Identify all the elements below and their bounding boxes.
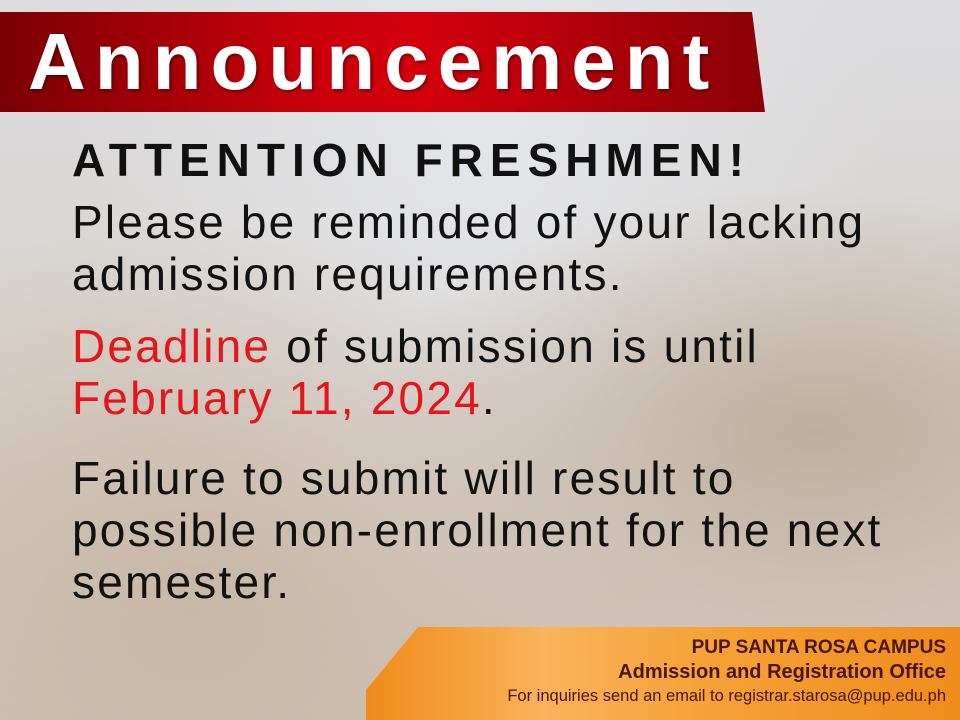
text block: failure warning (72, 452, 883, 608)
text block: failure warning: semester. (72, 556, 291, 608)
title text: Announcement (28, 17, 718, 106)
footer: office: Admission and Registration Office (618, 661, 946, 683)
heading: attention freshmen: ATTENTION FRESHMEN! (72, 134, 751, 186)
text block: failure warning: Failure to submit will result to (72, 452, 735, 504)
text block: deadline: February 11, 2024. (72, 372, 497, 424)
text block: reminder: admission requirements. (72, 248, 624, 300)
text block: deadline: Deadline of submission is until (72, 320, 759, 372)
text block: reminder: Please be reminded of your lacking (72, 196, 865, 248)
footer: contact: For inquiries send an email to registrar.starosa@pup.edu.ph (507, 687, 946, 705)
title banner (0, 12, 765, 112)
text block: reminder (72, 196, 865, 300)
text block: failure warning: possible non-enrollment for the next (72, 504, 883, 556)
text block: deadline (72, 320, 759, 424)
footer: campus: PUP SANTA ROSA CAMPUS (692, 637, 946, 658)
footer panel: office info (366, 627, 960, 720)
